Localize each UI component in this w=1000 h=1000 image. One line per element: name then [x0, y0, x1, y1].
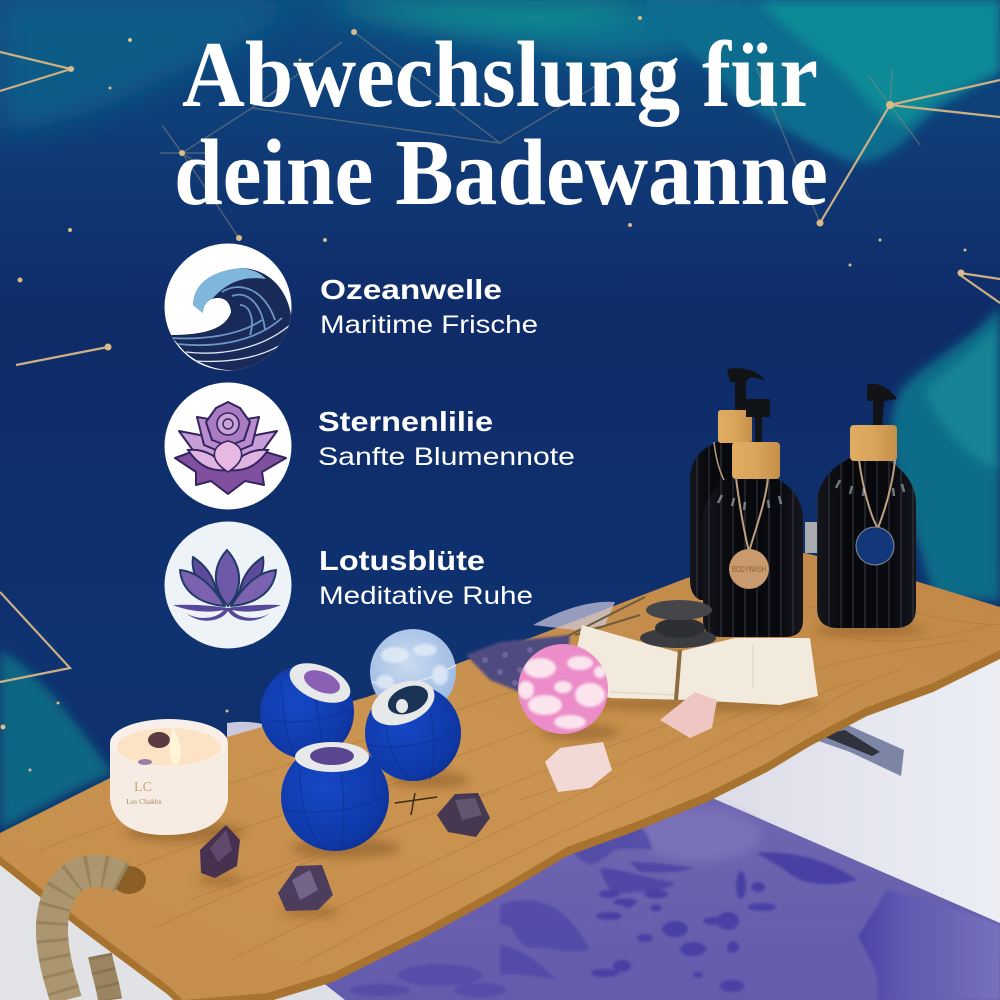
purple bath water [317, 797, 1000, 1000]
scent item: Sternenlilie [164, 382, 575, 510]
item text: Meditative Ruhe [319, 582, 533, 610]
right bottle [817, 384, 916, 628]
item text [319, 545, 533, 610]
icon: wave [164, 244, 292, 370]
title [174, 23, 828, 225]
icon: purple lily [164, 382, 292, 510]
item text: Sanfte Blumennote [318, 443, 575, 471]
icon: lotus [164, 522, 292, 648]
wooden bath board [0, 522, 1000, 1000]
title: deine Badewanne [174, 121, 828, 225]
item text [318, 406, 575, 471]
bottles: black soap dispensers [690, 368, 916, 637]
rope handle [52, 871, 122, 1000]
item text: Maritime Frische [320, 311, 538, 339]
item text: Ozeanwelle [320, 274, 502, 305]
rolled towel [570, 625, 818, 705]
pale blue bath bomb [370, 629, 456, 715]
scent item: Lotusblüte [164, 522, 533, 648]
scent item: Ozeanwelle [164, 244, 538, 370]
item text: Lotusblüte [319, 545, 485, 576]
pink bath bomb [518, 644, 608, 734]
tub: white wall [0, 640, 1000, 1000]
candle: LC [134, 780, 152, 795]
contact shadows [125, 624, 925, 917]
constellation lines [0, 16, 1000, 772]
crystals: amethyst and rose quartz [200, 692, 717, 911]
lavender and ribbon [466, 597, 645, 692]
tub overflow fitting [810, 723, 904, 776]
candle: Les Chakhs [126, 797, 162, 806]
item text [320, 274, 538, 339]
back bottle [690, 368, 765, 600]
front bottle [703, 399, 803, 637]
blue bath bombs with labels [260, 655, 461, 851]
candle [110, 719, 228, 835]
item text: Sternenlilie [318, 406, 493, 437]
title: Abwechslung für [182, 23, 818, 127]
front bottle: BODYWASH [732, 564, 766, 574]
stacked black stones [640, 600, 716, 648]
